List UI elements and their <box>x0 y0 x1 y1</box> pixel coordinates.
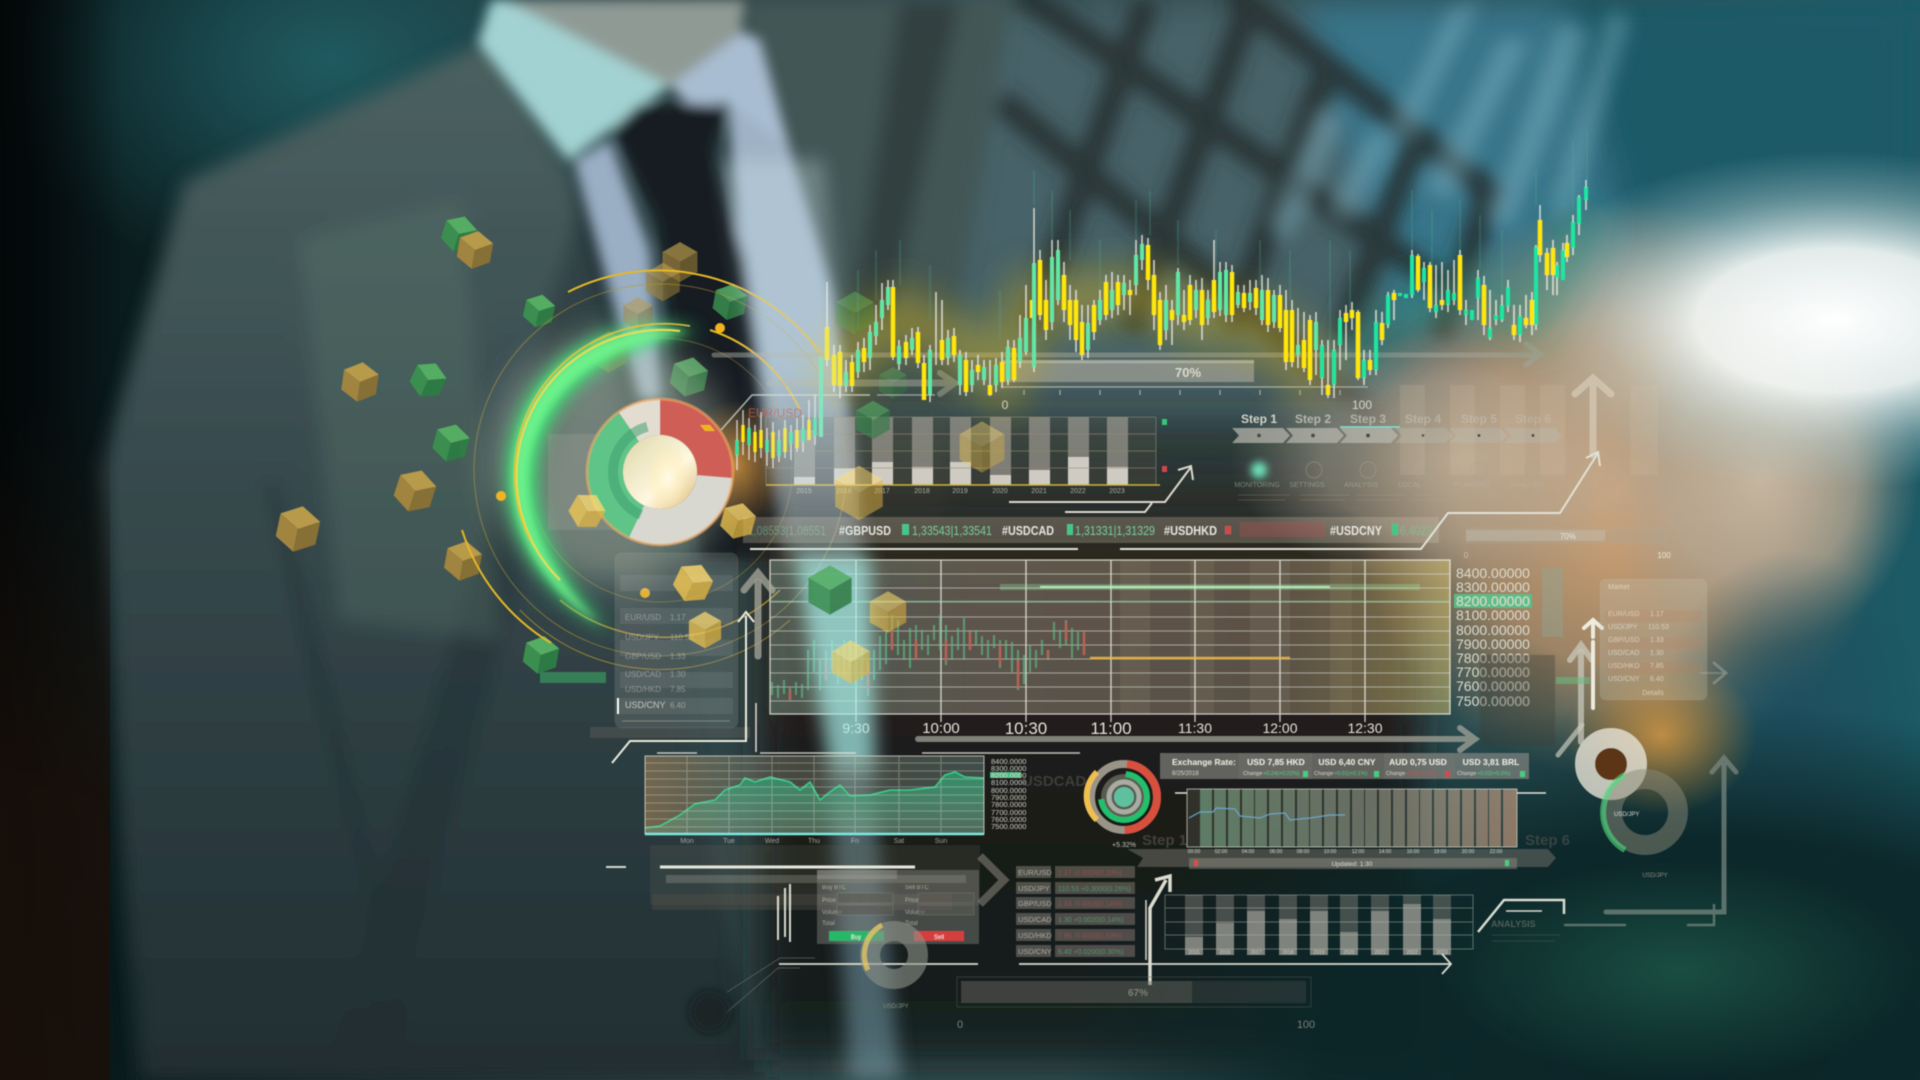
bottom left connector and dark dot <box>688 958 815 1034</box>
axis values <box>1454 565 1532 709</box>
exchange rate bar: +0.24(+0.22%) <box>1263 771 1300 777</box>
grey arrow below main chart <box>918 728 1475 750</box>
hourly columns chart: 20:00 <box>1462 849 1474 855</box>
right data panel <box>1480 568 1707 745</box>
left data panel: USD/HKD <box>625 685 661 694</box>
steps process bar: LOCAL <box>1399 482 1422 489</box>
exchange rate bar: Change <box>1386 771 1405 777</box>
hourly columns chart: 08:00 <box>1297 849 1309 855</box>
arrow line: rising from bar chart <box>1009 466 1193 512</box>
area chart panel: 7900.0000 <box>991 793 1026 802</box>
bottom yearly bar chart: 2022 <box>1406 950 1418 956</box>
hourly columns chart: 00:00 <box>1188 849 1200 855</box>
right data panel: USD/CAD <box>1608 650 1640 657</box>
axis values: 7900.00000 <box>1456 636 1530 652</box>
axis values: 8400.00000 <box>1456 565 1530 581</box>
left data panel: USD/JPY <box>625 633 659 642</box>
hourly columns chart: 04:00 <box>1242 849 1254 855</box>
small progress bar 70 percent <box>1464 528 1671 560</box>
ticker strip: #USDCAD <box>1002 523 1054 538</box>
bracket and analysis note <box>1478 900 1564 941</box>
inner glow <box>548 434 618 530</box>
order panel: Sell BTC <box>905 885 929 891</box>
axis values: 8200.00000 <box>1456 593 1530 609</box>
right data panel: 1.17 <box>1650 611 1664 618</box>
green bodies in gold section <box>821 244 1316 437</box>
order panel: Buy <box>851 935 861 941</box>
rates table: 110.53 +0.3000(0.26%) <box>1058 886 1131 893</box>
order panel: Volume <box>905 910 926 916</box>
connector and small pair label: EUR/USD <box>748 406 802 420</box>
exchange rate bar: Change <box>1314 771 1333 777</box>
left data panel: USD/CAD <box>625 670 661 679</box>
ticker strip: 1,31331|1,31329 <box>1075 523 1155 538</box>
area chart panel <box>645 756 1026 845</box>
exchange rate bar: USD 7,85 HKD <box>1247 757 1305 767</box>
progress bar 67 percent: 100 <box>1297 1019 1315 1031</box>
bar chart: top yearly bars: 2016 <box>836 488 852 495</box>
area chart panel: Sun <box>935 838 947 845</box>
grey progress arrows <box>714 344 1540 394</box>
left data panel <box>540 553 750 738</box>
area chart panel: Wed <box>765 838 779 845</box>
intraday candles <box>772 615 1084 700</box>
order panel: Price <box>822 898 836 904</box>
hourly columns chart: 10:00 <box>1324 849 1336 855</box>
area chart panel: 7500.0000 <box>991 822 1026 831</box>
step icons <box>1306 462 1541 478</box>
right side arrows <box>1558 620 1726 755</box>
order panel: Buy BTC <box>822 885 847 891</box>
steps process bar: ANALYSIS <box>1510 482 1544 489</box>
hourly strip arrow backdrop <box>1127 832 1570 867</box>
rates table: 7.85 -0.0030(0.03%) <box>1058 933 1122 940</box>
hourly columns chart <box>1175 789 1546 869</box>
area chart panel: 8200.0000 <box>991 771 1026 780</box>
backdrop strip with white bar <box>606 845 980 942</box>
rates table: EUR/USD <box>1018 868 1052 877</box>
faded background bars and up arrow <box>1400 378 1658 475</box>
axis values: 8300.00000 <box>1456 579 1530 595</box>
time labels: 11:00 <box>1090 719 1132 738</box>
arrow line: ticker to upper right <box>750 452 1600 549</box>
icons: floating cubes behind dashboard <box>273 212 907 677</box>
area chart panel: 8000.0000 <box>991 786 1026 795</box>
right data panel: GBP/USD <box>1608 637 1640 644</box>
exchange rate bar: Exchange Rate: <box>1172 757 1236 767</box>
steps process bar: Step 5 <box>1461 412 1497 426</box>
left data panel: 110.53 <box>670 633 694 642</box>
tie <box>612 104 790 560</box>
progress bar: 70 percent: 0 <box>1002 398 1009 412</box>
exchange rate bar: -0.01(-0.1%) <box>1405 771 1436 777</box>
bar chart: top yearly bars <box>766 417 1167 495</box>
area chart panel: Mon <box>680 838 694 845</box>
rates table: 1.33 -0.0018(0.14%) <box>1058 901 1122 908</box>
right data panel: 7.85 <box>1650 663 1664 670</box>
rates table: USD/JPY <box>1018 884 1050 893</box>
time labels: 12:30 <box>1347 720 1383 736</box>
bar chart: top yearly bars: 2015 <box>796 488 812 495</box>
progress bar 67 percent: 67% <box>1128 988 1148 999</box>
rates table: 1.17 -0.0024(0.20%) <box>1058 870 1122 877</box>
right data panel: USD/HKD <box>1608 663 1640 670</box>
right data panel: 6.40 <box>1650 676 1664 683</box>
shirt bands <box>574 140 662 400</box>
green crescent <box>508 324 700 632</box>
rates table: 1.30 +0.0020(0.14%) <box>1058 917 1124 924</box>
steps process bar: Step 3 <box>1350 412 1386 426</box>
hourly columns chart: 16:00 <box>1407 849 1419 855</box>
progress bar: 70 percent <box>877 357 1372 412</box>
exchange rate bar: USD 3,81 BRL <box>1463 757 1519 767</box>
order panel <box>817 870 979 944</box>
left data panel: 1.30 <box>670 670 686 679</box>
left data panel: 1.17 <box>670 613 686 622</box>
neck <box>500 0 745 86</box>
small progress bar 70 percent: 0 <box>1464 551 1469 560</box>
right data panel: 110.53 <box>1648 624 1669 631</box>
shirt collars <box>478 0 670 161</box>
window lattice <box>900 0 1920 420</box>
time labels: 9:30 <box>842 720 870 736</box>
grey L-shaped arrow on right <box>1565 758 1736 925</box>
sell button <box>914 931 964 941</box>
time labels <box>842 719 1383 738</box>
time labels: 10:30 <box>1005 719 1047 738</box>
progress bar: 70 percent: 100 <box>1352 398 1372 412</box>
small progress bar 70 percent: 100 <box>1657 551 1671 560</box>
hourly columns chart: 14:00 <box>1379 849 1391 855</box>
ticker strip: 1,33543|1,33541 <box>912 523 992 538</box>
area chart panel: 7700.0000 <box>991 808 1026 817</box>
small ring bottom <box>864 925 918 1010</box>
ticker strip <box>743 517 1439 543</box>
steps process bar: ANALYSIS <box>1344 482 1378 489</box>
main candlestick panel <box>770 560 1532 738</box>
wicks <box>827 180 1586 402</box>
right data panel: Details <box>1642 690 1664 697</box>
yellow bodies <box>827 220 1567 400</box>
hourly columns chart: 22:00 <box>1490 849 1502 855</box>
exchange rate bar: +0.01(+0.1%) <box>1334 771 1367 777</box>
order panel: Total <box>822 921 835 927</box>
area chart panel: 8300.0000 <box>991 764 1026 773</box>
left data panel: 1.33 <box>670 652 686 661</box>
right data panel: USD/CNY <box>1608 676 1640 683</box>
hourly columns chart: Updated: 1:30 <box>1332 861 1373 868</box>
exchange rate bar: +0.02(+0.3%) <box>1477 771 1510 777</box>
hourly columns chart: 18:00 <box>1434 849 1446 855</box>
left data panel: USD/CNY <box>625 700 666 710</box>
bottom yearly bar chart: 2021 <box>1374 950 1386 956</box>
bottom yearly bar chart: 2020 <box>1343 950 1355 956</box>
bar chart: top yearly bars: 2023 <box>1109 488 1125 495</box>
chart glow <box>830 210 1590 390</box>
area chart panel: 7800.0000 <box>991 800 1026 809</box>
bottom yearly bar chart: 2016 <box>1219 950 1231 956</box>
order panel: Price <box>905 898 919 904</box>
arrow line: bottom long arrow <box>779 954 1451 974</box>
small progress bar 70 percent: 70% <box>1560 532 1576 541</box>
steps process bar: Step 4 <box>1405 412 1441 426</box>
axis values: 8000.00000 <box>1456 622 1530 638</box>
progress bar: 70 percent: 70% <box>1175 365 1201 380</box>
right data panel: 1.30 <box>1650 650 1664 657</box>
bar chart: top yearly bars: 2019 <box>952 488 968 495</box>
ticker strip: #USDHKD <box>1164 523 1217 538</box>
steps process bar: PLANNING <box>1454 482 1490 489</box>
steps process bar: SETTINGS <box>1289 482 1325 489</box>
jacket <box>100 0 1010 1080</box>
time labels: 12:00 <box>1262 720 1298 736</box>
arrow line: up to hourly chart <box>1146 876 1170 985</box>
green bodies in green section <box>1322 187 1586 385</box>
hourly columns chart: 02:00 <box>1215 849 1227 855</box>
area chart panel: Sat <box>894 838 904 845</box>
faded pair label: USDCAD <box>1022 773 1086 790</box>
bottom yearly bar chart: 2023 <box>1436 950 1448 956</box>
axis values: 7500.00000 <box>1456 693 1530 709</box>
inner wash <box>490 335 730 585</box>
right data panel: EUR/USD <box>1608 611 1640 618</box>
left data panel: GBP/USD <box>625 652 661 661</box>
steps process bar: Step 2 <box>1295 412 1331 426</box>
order panel: Total <box>905 921 918 927</box>
bottom yearly bar chart <box>1165 895 1473 956</box>
left data panel: EUR/USD <box>625 613 661 622</box>
small lead-in candles <box>737 395 815 470</box>
light beam of the shirt <box>720 160 900 1080</box>
bar chart: top yearly bars: 2018 <box>914 488 930 495</box>
hologram: all interface layers <box>462 130 1736 1080</box>
gold and green cubes in front <box>564 401 1004 684</box>
axis values: 7800.00000 <box>1456 650 1530 666</box>
ring dial gauge <box>1087 761 1160 849</box>
bar chart: top yearly bars: 2017 <box>874 488 890 495</box>
ghost streaks <box>858 130 1587 380</box>
donut chart <box>587 399 733 545</box>
small ring bottom: USD/JPY <box>883 1004 909 1010</box>
exchange rate bar: USD 6,40 CNY <box>1318 757 1376 767</box>
progress bar 67 percent: 0 <box>957 1019 963 1031</box>
bar chart: top yearly bars: 2021 <box>1031 488 1047 495</box>
rates table: USD/CAD <box>1018 915 1052 924</box>
exchange rate bar: Change <box>1457 771 1476 777</box>
exchange rate bar: AUD 0,75 USD <box>1389 757 1447 767</box>
area chart panel: Thu <box>808 838 820 845</box>
rates table: USD/HKD <box>1018 931 1052 940</box>
bar chart: top yearly bars: 2020 <box>992 488 1008 495</box>
rates table: USD/CNY <box>1018 947 1052 956</box>
progress bar 67 percent <box>957 977 1315 1031</box>
steps process bar: Step 6 <box>1515 412 1551 426</box>
right data panel: Market <box>1608 584 1629 591</box>
HUD thin rings <box>462 270 846 669</box>
area chart panel: 8400.0000 <box>991 757 1026 766</box>
bottom yearly bar chart: 2015 <box>1188 950 1200 956</box>
ticker strip: 1,08553|1,08551 <box>748 523 826 538</box>
rates table: 6.40 +0.0200(0.30%) <box>1058 949 1124 956</box>
ticker strip: #GBPUSD <box>839 523 891 538</box>
arrow lines: left panel <box>612 573 1080 763</box>
right data panel: 1.33 <box>1650 637 1664 644</box>
order panel: Sell <box>934 935 944 941</box>
steps process bar <box>1232 412 1562 500</box>
area chart panel: 8100.0000 <box>991 778 1026 787</box>
left data panel: 6.40 <box>670 701 686 710</box>
exchange rate bar: 8/25/2018 <box>1172 771 1199 777</box>
ticker strip: #USDCNY <box>1330 523 1382 538</box>
order panel: Volume <box>822 910 843 916</box>
right side rings: USD/JPY <box>1614 812 1639 818</box>
buy button <box>829 931 884 941</box>
grey chevron <box>980 856 1004 904</box>
hourly columns chart: 12:00 <box>1352 849 1364 855</box>
rates table <box>1016 866 1135 957</box>
right data panel: USD/JPY <box>1608 624 1638 631</box>
area chart panel: Fri <box>851 838 860 845</box>
bottom yearly bar chart: 2017 <box>1250 950 1262 956</box>
ring dial gauge: +5.32% <box>1112 842 1136 849</box>
hourly strip arrow backdrop: Step 1 <box>1142 832 1187 849</box>
bottom yearly bar chart: 2019 <box>1313 950 1325 956</box>
rates table: GBP/USD <box>1018 899 1052 908</box>
time labels: 10:00 <box>922 720 960 737</box>
steps process bar: MONITORING <box>1234 482 1280 489</box>
right side rings <box>1585 738 1678 879</box>
area chart panel: Tue <box>723 838 735 845</box>
bracket and analysis note: ANALYSIS <box>1491 919 1536 929</box>
yellow dots <box>715 323 725 333</box>
circular HUD gauge <box>462 270 846 669</box>
right side rings: USD/JPY <box>1642 873 1668 879</box>
axis values: 7600.00000 <box>1456 678 1530 694</box>
axis values: 7700.00000 <box>1456 664 1530 680</box>
steps process bar: Step 1 <box>1241 412 1277 426</box>
hourly columns chart: 06:00 <box>1270 849 1282 855</box>
candlestick chart: main gold and green line <box>737 130 1590 470</box>
exchange rate bar: Change <box>1243 771 1262 777</box>
area chart panel: 7600.0000 <box>991 815 1026 824</box>
time labels: 11:30 <box>1178 720 1212 736</box>
hourly strip arrow backdrop: Step 6 <box>1525 832 1570 849</box>
axis values: 8100.00000 <box>1456 607 1530 623</box>
bottom yearly bar chart: 2018 <box>1282 950 1294 956</box>
exchange rate bar <box>1160 753 1529 779</box>
bar chart: top yearly bars: 2022 <box>1070 488 1086 495</box>
glowing level lines <box>1000 584 1420 590</box>
left data panel: 7.85 <box>670 685 686 694</box>
connector and small pair label <box>721 395 870 430</box>
ticker strip: 6,4023 <box>1400 523 1432 538</box>
